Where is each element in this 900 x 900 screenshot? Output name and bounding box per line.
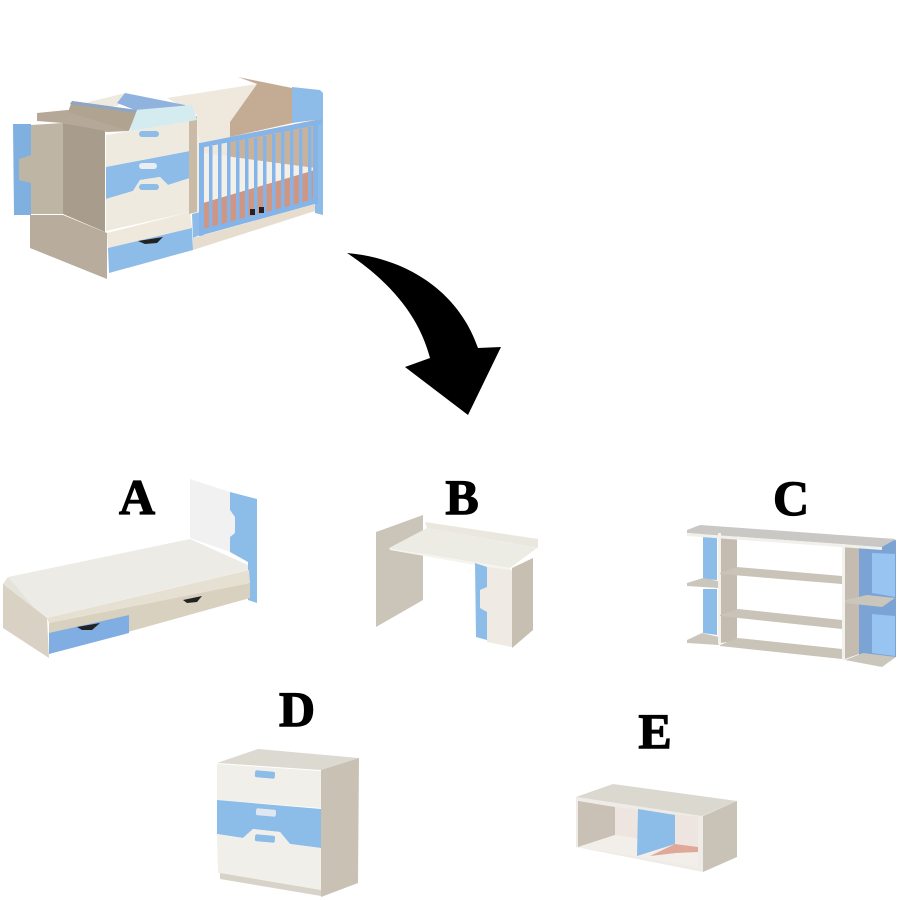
label A: A — [119, 469, 155, 525]
crib with changing table — [13, 77, 323, 279]
arrow — [347, 253, 501, 415]
label C: C — [773, 470, 809, 526]
label D: D — [279, 681, 315, 737]
chest of drawers D — [217, 749, 359, 897]
crib slats — [199, 119, 322, 236]
desk B — [376, 515, 538, 648]
changing tray — [68, 93, 197, 131]
label B: B — [445, 469, 479, 525]
shelf C — [687, 525, 896, 667]
bed A — [3, 479, 257, 658]
crib mattress and sides — [203, 120, 315, 230]
box shelf E — [576, 784, 737, 872]
label E: E — [638, 703, 672, 759]
